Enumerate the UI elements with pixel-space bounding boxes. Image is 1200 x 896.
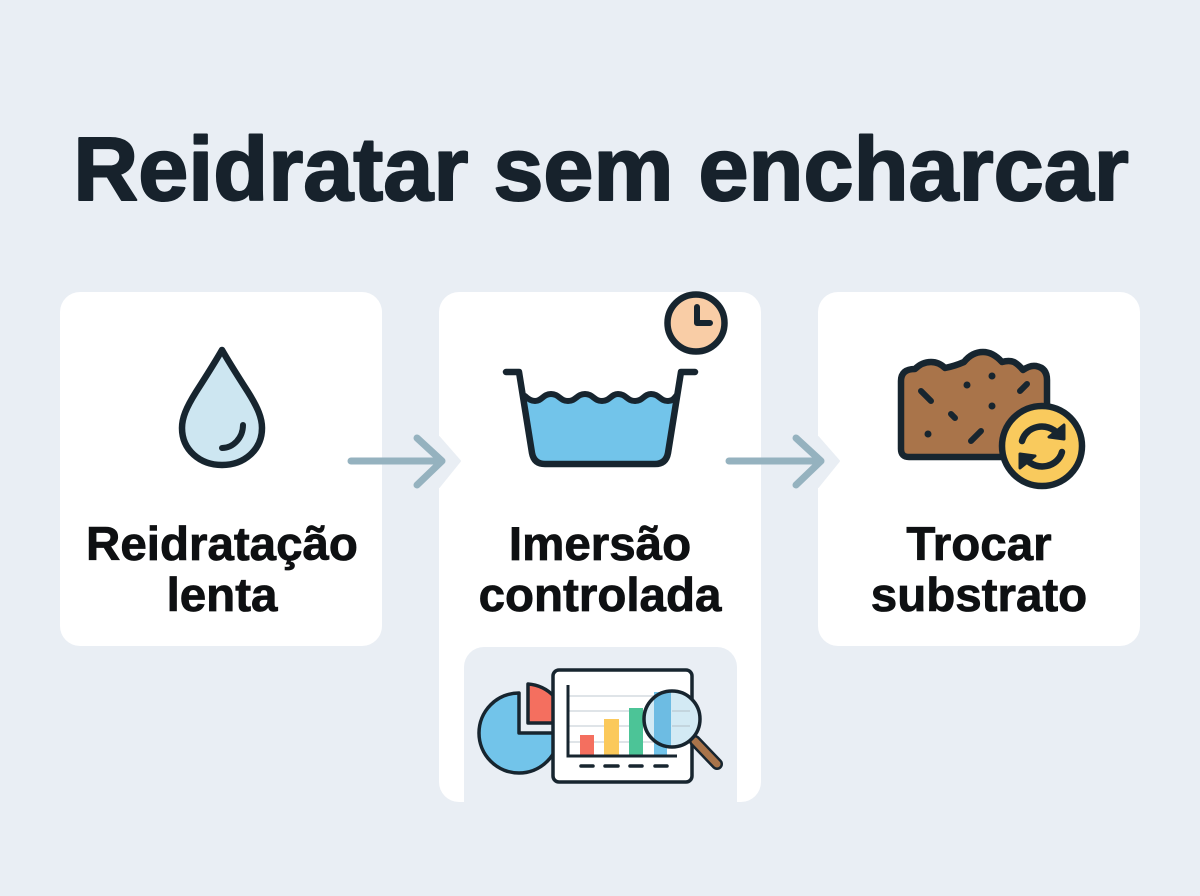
icon: clock: [668, 294, 724, 352]
arrow: step two to three: [729, 437, 839, 487]
label: slow rehydration: Reidratação: [86, 518, 358, 571]
label: slow rehydration: lenta: [167, 569, 278, 622]
icon: magnifying glass: [644, 691, 717, 764]
panel: controlled immersion: [439, 292, 761, 896]
icon: soil block: [901, 352, 1047, 457]
label: change substrate: Trocar: [906, 518, 1052, 571]
icon: water drop: [182, 350, 262, 465]
panel: slow rehydration: [60, 292, 382, 646]
icon: pie chart: [479, 684, 565, 773]
title: Reidratar sem encharcar: [73, 120, 1129, 220]
label: change substrate: substrato: [871, 569, 1087, 622]
icon: water basin: [506, 372, 695, 464]
icon: bar chart report: [553, 670, 692, 782]
arrow: step one to two: [351, 437, 460, 487]
label: controlled immersion: Imersão: [509, 518, 691, 571]
icon: refresh badge: [1002, 406, 1082, 486]
panel: change substrate: [818, 292, 1140, 646]
inset panel: data analysis: [464, 647, 737, 896]
label: controlled immersion: controlada: [479, 569, 722, 622]
